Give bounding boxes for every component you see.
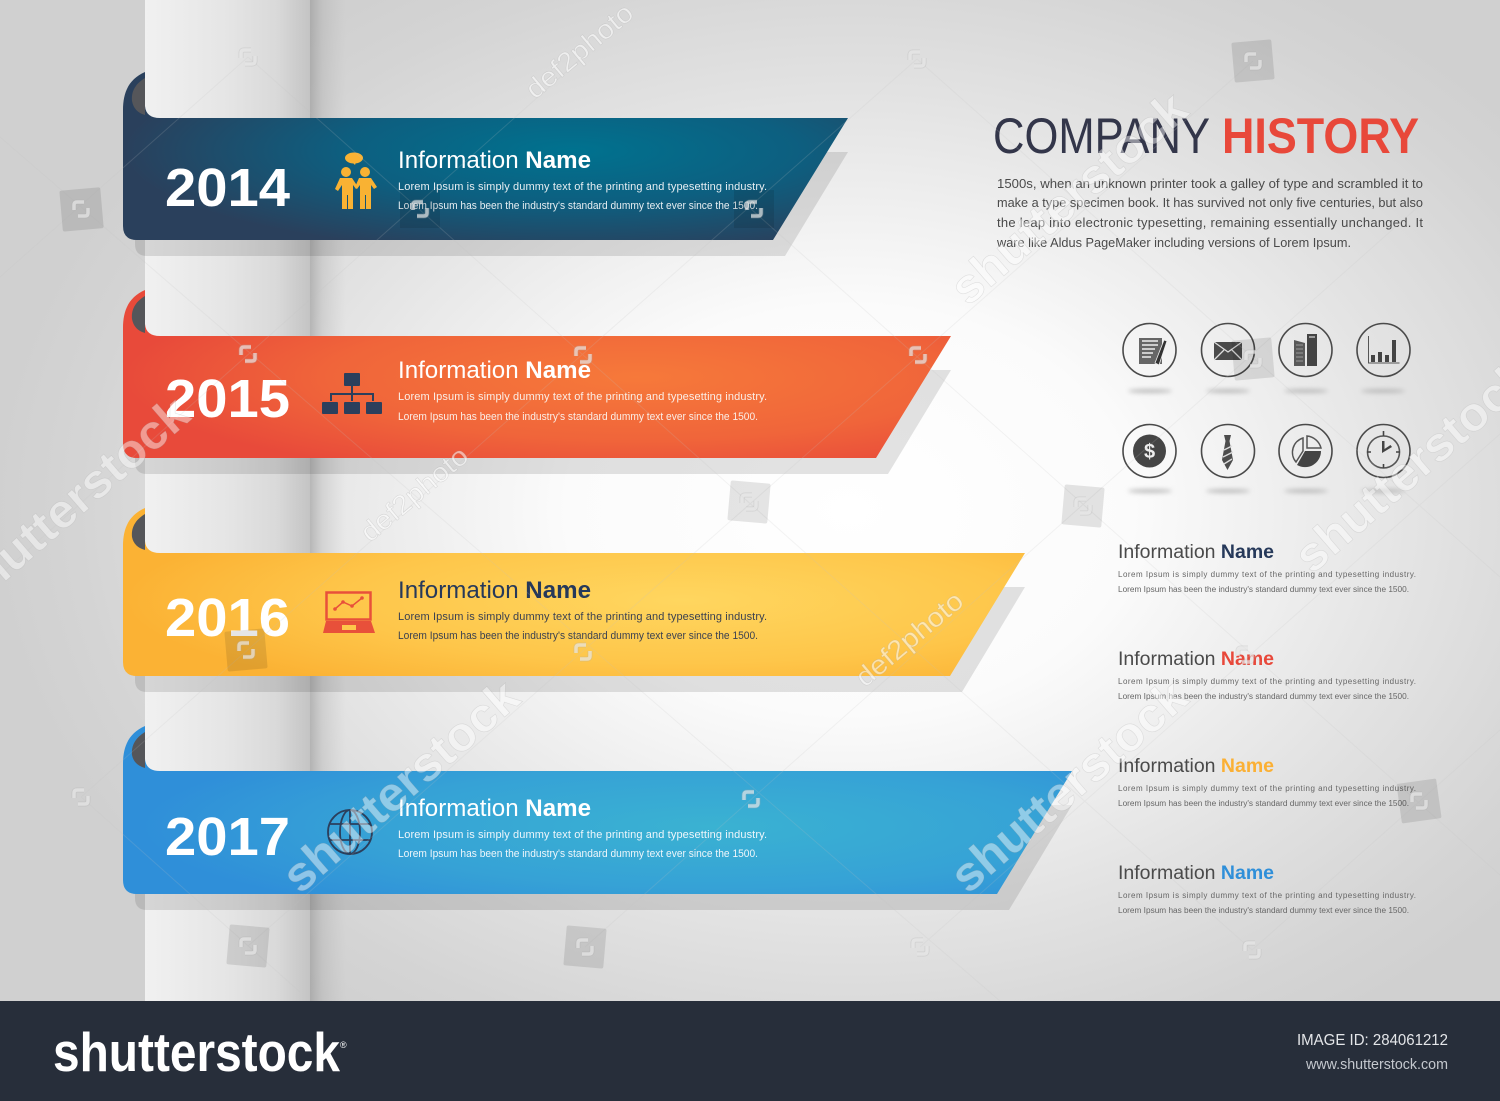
text block: Information Name bbox=[398, 577, 591, 604]
text block bbox=[398, 357, 767, 423]
icon: two people bbox=[335, 152, 377, 209]
text block: Information Name bbox=[398, 357, 591, 384]
icon grid bbox=[1123, 324, 1410, 493]
icon: necktie bbox=[1202, 424, 1254, 478]
info item 2: Lorem Ipsum is simply dummy text of the printing and typesetting industry. bbox=[1118, 677, 1416, 686]
intro paragraph: ware like Aldus PageMaker including versions of Lorem Ipsum. bbox=[996, 235, 1351, 250]
ribbon 2017 bbox=[123, 726, 1072, 910]
icon: laptop chart bbox=[323, 592, 375, 633]
intro paragraph: make a type specimen book. It has survived not only five centuries, but also bbox=[997, 195, 1423, 210]
text block: Lorem Ipsum is simply dummy text of the printing and typesetting industry. bbox=[398, 391, 767, 403]
watermarks: def2photo bbox=[355, 440, 474, 548]
text block bbox=[398, 147, 767, 212]
ribbon 2016 bbox=[123, 508, 1025, 692]
footer url: www.shutterstock.com bbox=[1305, 1057, 1448, 1073]
watermarks: shutterstock bbox=[940, 670, 1198, 903]
intro paragraph: the leap into electronic typesetting, remaining essentially unchanged. It bbox=[997, 215, 1423, 230]
text block: Lorem Ipsum is simply dummy text of the printing and typesetting industry. bbox=[398, 181, 767, 193]
info item 3: Lorem Ipsum is simply dummy text of the printing and typesetting industry. bbox=[1118, 784, 1416, 793]
info item 1: Lorem Ipsum is simply dummy text of the printing and typesetting industry. bbox=[1118, 570, 1416, 579]
info item 1: Lorem Ipsum has been the industry's standard dummy text ever since the 1500. bbox=[1118, 585, 1409, 594]
icon: clock bbox=[1357, 424, 1410, 478]
icon: org chart bbox=[322, 373, 382, 414]
text block: Lorem Ipsum is simply dummy text of the printing and typesetting industry. bbox=[398, 611, 767, 623]
info item 2: Information Name bbox=[1118, 649, 1274, 670]
info item 4: Information Name bbox=[1118, 863, 1274, 884]
watermarks: def2photo bbox=[850, 585, 969, 693]
icon: envelope bbox=[1202, 324, 1254, 376]
info item 4: Lorem Ipsum is simply dummy text of the printing and typesetting industry. bbox=[1118, 891, 1416, 900]
ribbon 2014 bbox=[123, 72, 848, 256]
text block: Lorem Ipsum is simply dummy text of the printing and typesetting industry. bbox=[398, 829, 767, 841]
title: HISTORY bbox=[1222, 108, 1419, 164]
text block: Lorem Ipsum has been the industry's standard dummy text ever since the 1500. bbox=[398, 848, 758, 860]
info item 3: Lorem Ipsum has been the industry's standard dummy text ever since the 1500. bbox=[1118, 799, 1409, 808]
info item 2: Lorem Ipsum has been the industry's standard dummy text ever since the 1500. bbox=[1118, 692, 1409, 701]
text block bbox=[398, 577, 767, 642]
title bbox=[993, 108, 1419, 164]
icon: bar chart bbox=[1357, 324, 1410, 376]
info item 4 bbox=[1118, 863, 1416, 915]
watermarks: shutterstock bbox=[940, 82, 1198, 315]
info item 1 bbox=[1118, 542, 1416, 594]
icon shadows bbox=[1128, 389, 1405, 493]
year: 2016 bbox=[165, 588, 290, 648]
text block: Information Name bbox=[398, 795, 591, 822]
info item 3 bbox=[1118, 756, 1416, 808]
icon: dollar coin: $ bbox=[1144, 441, 1155, 463]
info item 4: Lorem Ipsum has been the industry's standard dummy text ever since the 1500. bbox=[1118, 906, 1409, 915]
image id: IMAGE ID: 284061212 bbox=[1297, 1032, 1448, 1049]
text block: Lorem Ipsum has been the industry's standard dummy text ever since the 1500. bbox=[398, 200, 758, 212]
footer logo: shutterstock bbox=[53, 1021, 340, 1083]
icon: dollar coin bbox=[1123, 424, 1176, 478]
text block: Lorem Ipsum has been the industry's standard dummy text ever since the 1500. bbox=[398, 630, 758, 642]
watermarks: def2photo bbox=[520, 0, 639, 105]
year: 2014 bbox=[165, 158, 290, 218]
icon: buildings bbox=[1279, 324, 1332, 376]
intro paragraph bbox=[996, 176, 1423, 250]
icon: pie chart bbox=[1279, 424, 1332, 478]
ribbon 2015 bbox=[123, 290, 951, 474]
registered mark: ® bbox=[340, 1040, 347, 1050]
footer bar bbox=[0, 1001, 1500, 1101]
intro paragraph: 1500s, when an unknown printer took a galley of type and scrambled it to bbox=[997, 176, 1423, 191]
icon: document and pen bbox=[1123, 324, 1176, 376]
info item 1: Information Name bbox=[1118, 542, 1274, 563]
text block: Lorem Ipsum has been the industry's standard dummy text ever since the 1500. bbox=[398, 411, 758, 423]
title: COMPANY bbox=[993, 108, 1210, 164]
text block bbox=[398, 795, 767, 860]
info item 2 bbox=[1118, 649, 1416, 701]
watermarks: shutterstock bbox=[272, 670, 530, 903]
paper column bbox=[145, 0, 346, 1001]
year: 2017 bbox=[165, 807, 290, 867]
year: 2015 bbox=[165, 369, 290, 429]
icon: globe bbox=[328, 810, 372, 854]
text block: Information Name bbox=[398, 147, 591, 174]
info item 3: Information Name bbox=[1118, 756, 1274, 777]
